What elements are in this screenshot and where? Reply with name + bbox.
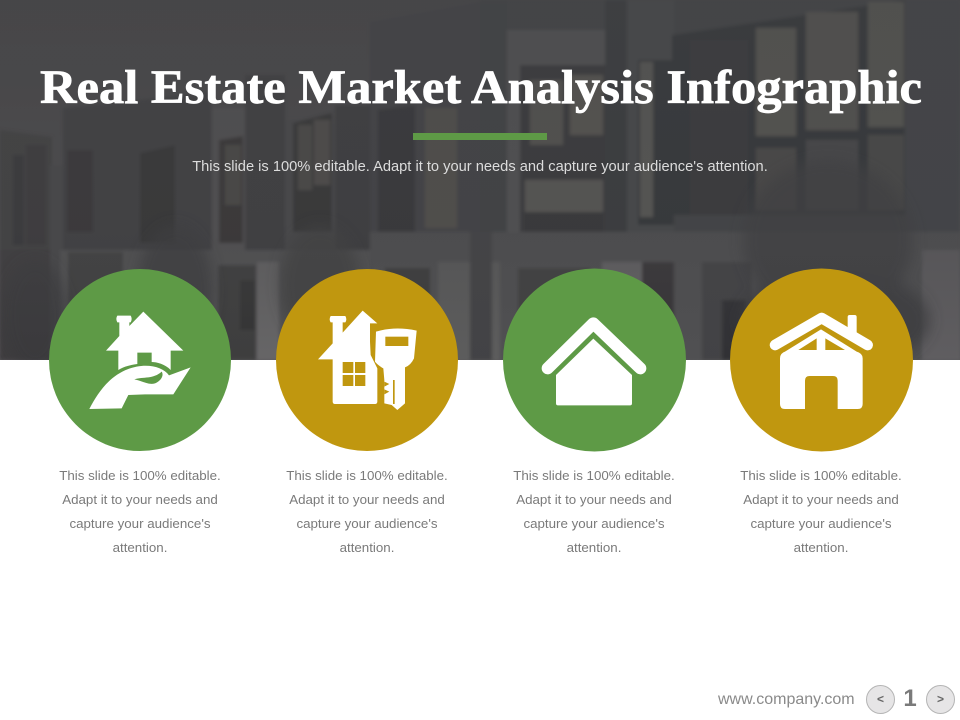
panel: item 4 — [730, 268, 913, 555]
text: item 4: attention. — [794, 540, 848, 555]
footer: next button: > — [937, 692, 944, 706]
text: item 4: capture your audience's — [750, 516, 892, 531]
footer: previous button: < — [877, 692, 884, 706]
title: Real Estate Market Analysis Infographic — [40, 61, 922, 114]
text: item 1: attention. — [113, 540, 167, 555]
icon: house with truss roof in gold circle — [730, 268, 913, 452]
text: item 2: This slide is 100% editable. — [286, 468, 448, 483]
text: item 1 — [59, 468, 221, 555]
text: item 2: capture your audience's — [296, 516, 438, 531]
text: item 3: Adapt it to your needs and — [516, 492, 672, 507]
background photo: darkened townhouses — [0, 0, 960, 360]
icon: house on open hand in green circle — [49, 269, 231, 451]
text: item 3: capture your audience's — [523, 516, 665, 531]
panel: item 2 — [276, 269, 458, 555]
text: item 2 — [286, 468, 448, 555]
text: item 4: Adapt it to your needs and — [743, 492, 899, 507]
subtitle: This slide is 100% editable. Adapt it to your needs and capture your audience's attention. — [192, 159, 768, 175]
text: item 4: This slide is 100% editable. — [740, 468, 902, 483]
panel: item 3 — [503, 268, 686, 555]
text: item 2: Adapt it to your needs and — [289, 492, 445, 507]
footer: previous button — [866, 685, 895, 714]
icon: simple house in green circle — [503, 268, 686, 452]
text: item 3: attention. — [567, 540, 621, 555]
footer: next button — [926, 685, 955, 714]
text: item 3 — [513, 468, 675, 555]
footer: website: www.company.com — [718, 691, 855, 708]
text: item 1: Adapt it to your needs and — [62, 492, 218, 507]
text: item 1: This slide is 100% editable. — [59, 468, 221, 483]
text: item 4 — [740, 468, 902, 555]
icon: house and key in gold circle — [276, 269, 458, 451]
text: item 1: capture your audience's — [69, 516, 211, 531]
text: item 3: This slide is 100% editable. — [513, 468, 675, 483]
green accent bar — [413, 133, 547, 140]
footer: page number: 1 — [903, 685, 917, 712]
panel: item 1 — [49, 269, 231, 555]
text: item 2: attention. — [340, 540, 394, 555]
